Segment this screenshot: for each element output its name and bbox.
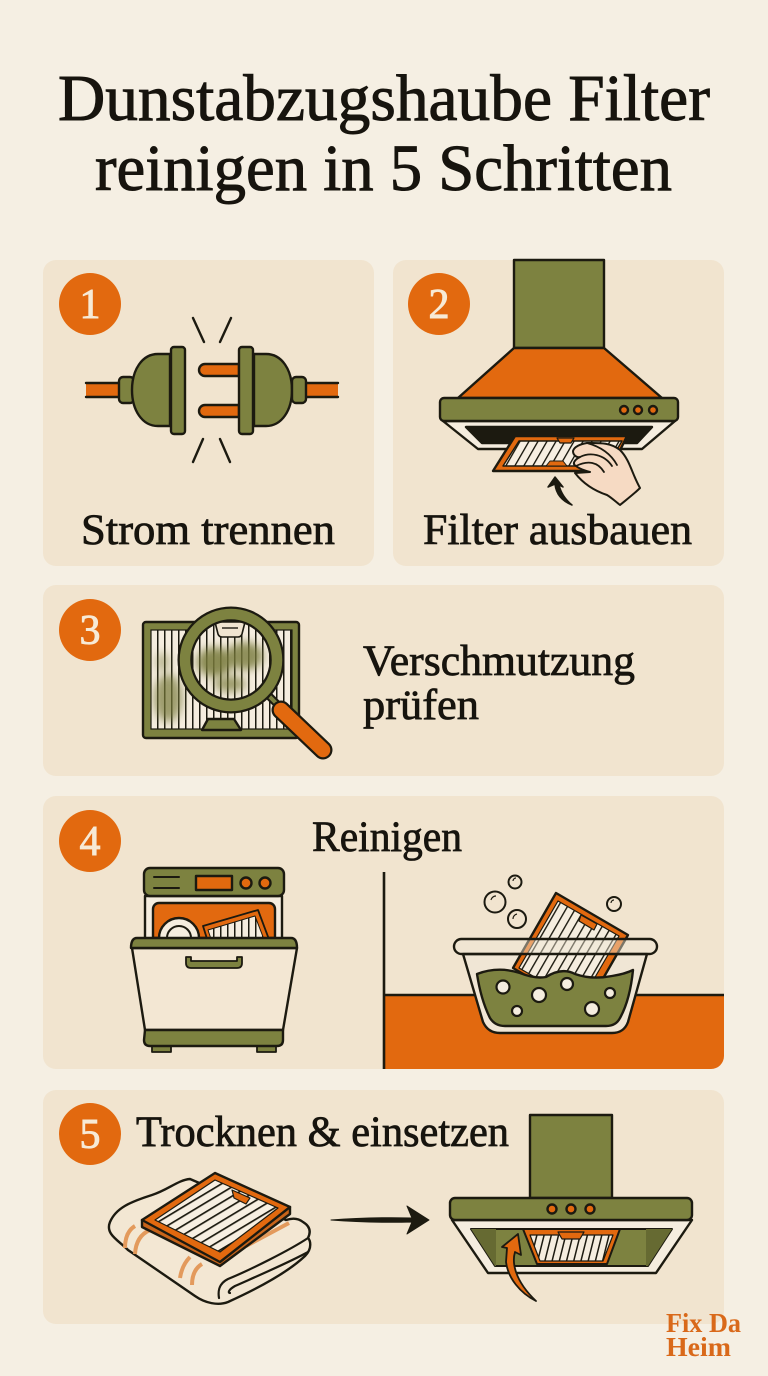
icon: bubbles bbox=[484, 876, 621, 928]
label: prüfen bbox=[363, 682, 479, 729]
panel: step 2 bbox=[393, 260, 724, 566]
badge 1: 1 bbox=[80, 282, 100, 328]
divider and counter bbox=[384, 872, 724, 1069]
icon: basin with filter bbox=[454, 893, 657, 1033]
label: Filter ausbauen bbox=[423, 507, 692, 554]
badge 3 bbox=[59, 599, 121, 661]
label: Strom trennen bbox=[81, 507, 335, 554]
icon: hand bbox=[573, 443, 640, 505]
brand mark bbox=[666, 1308, 741, 1362]
badge 5 bbox=[59, 1103, 121, 1165]
badge 1 bbox=[59, 273, 121, 335]
label: Reinigen bbox=[312, 814, 462, 861]
hand finger lines bbox=[576, 443, 617, 472]
arrow up orange bbox=[502, 1234, 536, 1301]
panel: step 4 bbox=[43, 796, 724, 1069]
label bbox=[363, 638, 635, 729]
title: Dunstabzugshaube Filter bbox=[58, 62, 710, 135]
icon: dishwasher bbox=[131, 868, 297, 1052]
title bbox=[58, 62, 710, 205]
badge 3: 3 bbox=[80, 608, 100, 654]
badge 4 bbox=[59, 810, 121, 872]
icon: folded towel bbox=[109, 1173, 310, 1304]
icon: filter under magnifier bbox=[143, 614, 323, 750]
icon: unplugged plug bbox=[86, 318, 338, 462]
brand mark: Fix Da bbox=[666, 1308, 741, 1338]
badge 2: 2 bbox=[428, 282, 450, 328]
panel: step 1 bbox=[43, 260, 374, 566]
badge 4: 4 bbox=[80, 819, 100, 865]
brand mark: Heim bbox=[666, 1332, 732, 1362]
badge 5: 5 bbox=[80, 1112, 100, 1158]
badge 2 bbox=[408, 273, 470, 335]
icon: hood with inserted filter bbox=[450, 1115, 692, 1273]
label: Verschmutzung bbox=[363, 638, 635, 685]
panel: step 5 bbox=[43, 1090, 724, 1324]
icon: range hood with filter bbox=[440, 260, 678, 471]
panel: step 3 bbox=[43, 585, 724, 776]
label: Trocknen & einsetzen bbox=[136, 1109, 509, 1156]
arrow up bbox=[548, 477, 572, 505]
arrow right bbox=[331, 1206, 429, 1234]
title: reinigen in 5 Schritten bbox=[95, 132, 672, 205]
